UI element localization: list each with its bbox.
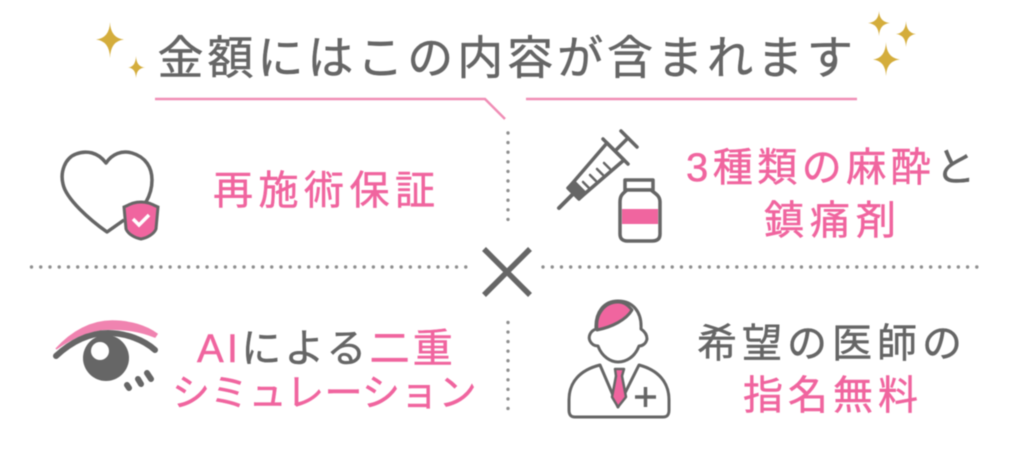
- label: 3種類の麻酔と: [686, 146, 980, 190]
- icon: doctor: [569, 301, 669, 417]
- label: 希望の医師の: [697, 322, 967, 366]
- dotted dividers: [32, 133, 977, 418]
- panel: anesthesia: 鎮痛剤: [764, 199, 902, 243]
- label: 再施術保証: [213, 169, 440, 213]
- panel: re-treatment guarantee: [62, 152, 440, 239]
- panel: anesthesia: [559, 131, 980, 243]
- icon: eye: [56, 321, 157, 388]
- label: AIによる二重: [197, 327, 456, 371]
- panel: doctor selection: 指名無料: [743, 374, 923, 418]
- panel: doctor selection: [569, 301, 967, 418]
- panel: AI simulation: [56, 321, 477, 415]
- panel: AI simulation: シミュレーション: [172, 373, 477, 415]
- icon: heart with shield: [62, 152, 158, 239]
- sparkles left: [96, 22, 145, 78]
- icon: syringe: [559, 131, 637, 208]
- title underline: [155, 99, 857, 119]
- sparkles right: [868, 11, 916, 76]
- title: 金額にはこの内容が含まれます: [158, 32, 857, 84]
- icon: medicine bottle: [620, 180, 660, 241]
- multiply symbol: [484, 249, 530, 295]
